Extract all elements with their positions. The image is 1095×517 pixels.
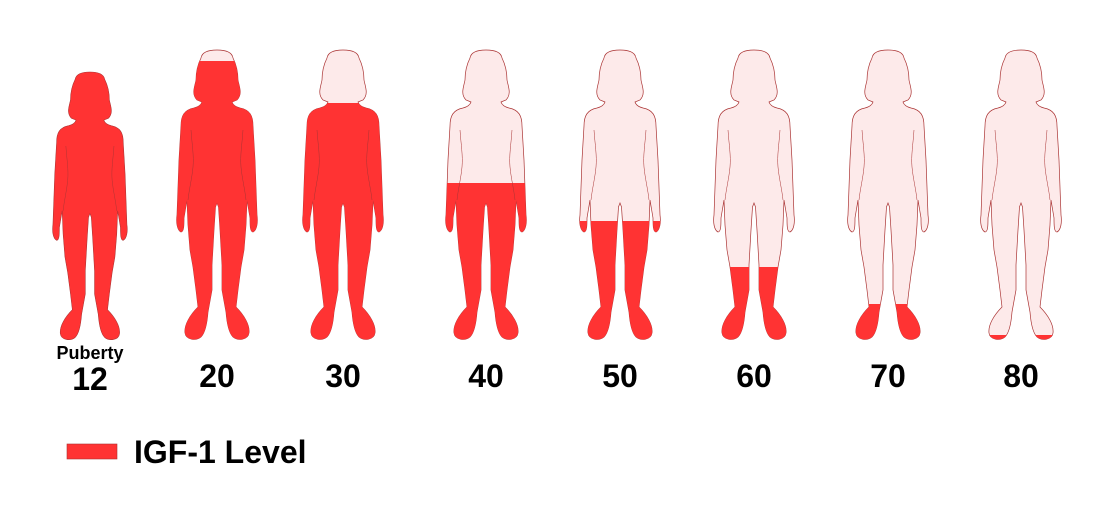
legend: IGF-1 Level <box>134 434 306 470</box>
age labels: 12 <box>72 361 108 397</box>
figure: age 20 <box>177 50 257 339</box>
age labels: 80 <box>1003 358 1039 394</box>
age labels: 70 <box>870 358 906 394</box>
age labels: 20 <box>199 358 235 394</box>
figure: age 60 <box>714 50 794 339</box>
age labels: 50 <box>602 358 638 394</box>
figure: age 80 <box>981 50 1061 339</box>
age labels: 40 <box>468 358 504 394</box>
figure: age 12 <box>53 72 127 340</box>
age labels: Puberty <box>56 343 124 363</box>
figure: age 30 <box>303 50 383 339</box>
age labels <box>56 343 1039 397</box>
age labels: 60 <box>736 358 772 394</box>
figure: age 70 <box>848 50 928 339</box>
figure: age 40 <box>446 50 526 339</box>
figure: age 50 <box>580 50 660 339</box>
age labels: 30 <box>325 358 361 394</box>
